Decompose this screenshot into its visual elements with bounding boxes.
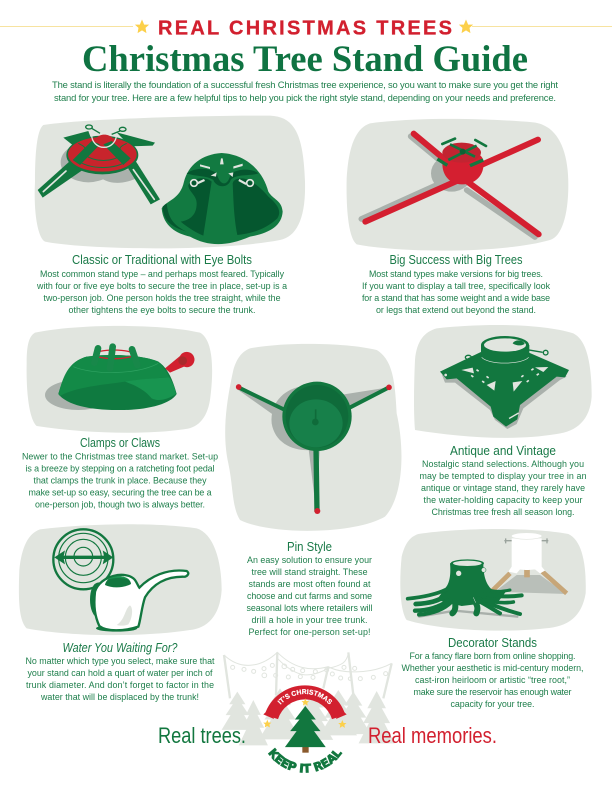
text block: decorator: make sure the reservoir has enough water [414,687,572,697]
intro line 2: stand for your tree. Here are a few helpful tips to help you pick the right style stand, depending on your needs and preference. [54,92,556,103]
text block: water: trunk diameter. And don’t forget to factor in the [26,680,214,690]
text block: clamps: is a breeze by stepping on a ratcheting foot pedal [26,464,215,474]
text block: water [26,656,215,702]
heading: antique: Antique and Vintage [450,444,556,458]
text block: clamps [22,452,218,510]
text block: antique: Christmas tree fresh all season long. [432,507,574,517]
panel: pin style illustration [225,344,401,531]
text block: decorator: capacity for your tree. [450,699,534,709]
text block: antique: antique or vintage stand, they rarely have [421,483,585,493]
header [0,18,612,103]
tagline left: Real trees. [158,723,246,748]
text block: decorator: cast-iron heirloom or artistic “tree root,” [415,675,570,685]
icon: star right [459,20,473,33]
text block: clamps: make set-up so easy, securing the tree can be a [28,488,212,498]
header rule left [0,26,133,27]
text block: water: your stand can hold a quart of water per inch of [28,668,213,678]
string lights backdrop [224,652,392,698]
text block: classic: with four or five eye bolts to secure the tree in place, set-up is a [36,281,287,291]
text block: classic: two-person job. One person holds the tree straight, while the [44,293,281,303]
icon: clamp stand [45,347,194,410]
text block: antique: may be tempted to display your tree in an [420,471,587,481]
text block: clamps: one-person job, though two is always better. [35,500,205,510]
icon: white reservoir stand [492,533,567,594]
text block: big trees: or legs that extend out beyond the stand. [376,305,536,315]
text block: water: No matter which type you select, make sure that [26,656,215,666]
text block: classic [36,269,287,315]
badge ribbon [271,692,339,717]
panel background [35,116,305,248]
icon: star left [135,20,149,33]
text block: big trees: Most stand types make versions for big trees. [369,269,543,279]
text block: big trees [362,269,551,315]
text block: antique [420,459,587,517]
panel: clamps illustration [27,326,212,433]
icon: cast iron stand [440,336,569,429]
heading: water: Water You Waiting For? [62,641,178,655]
text block: clamps: Newer to the Christmas tree stand market. Set-up [22,452,218,462]
text block: pin style: tree will stand straight. These [252,567,368,577]
text block: decorator [402,651,584,709]
icon: left star [263,720,271,728]
heading: classic: Classic or Traditional with Eye Bolts [72,253,252,267]
heading: pin style: Pin Style [287,540,332,554]
panel background [400,529,586,631]
title: Christmas Tree Stand Guide [82,39,528,80]
icon: watering can [92,570,188,632]
panel background [225,344,401,531]
heading: decorator: Decorator Stands [448,636,537,650]
text block: classic: other tightens the eye bolts to secure the trunk. [68,305,256,315]
panel: decorator illustration [400,529,586,631]
text block: pin style: drill a hole in your tree trunk. [252,615,368,625]
text block: pin style: An easy solution to ensure your [247,555,372,565]
icon: right star [338,720,346,728]
text block: classic: Most common stand type – and perhaps most feared. Typically [40,269,285,279]
text block: decorator: For a fancy flare born from online shopping. [410,651,576,661]
icon: tree root stand [408,559,522,617]
icon: red eye bolt stand [38,123,160,204]
badge text: KEEP IT REAL [268,748,342,773]
eyebrow heading: REAL CHRISTMAS TREES [158,18,452,40]
text block: pin style [246,555,373,637]
footer scene and badge [222,652,394,773]
icon: trunk rings [53,529,113,589]
panel: classic stand illustration [35,116,305,248]
icon: pin stand [236,382,392,514]
panel background [347,119,568,251]
badge [263,685,347,773]
tagline right: Real memories. [368,723,497,748]
text block: big trees: If you want to display a tall tree, specifically look [362,281,551,291]
icon: green stand underside [162,153,283,244]
heading: big trees: Big Success with Big Trees [390,253,522,267]
text block: pin style: stands are most often found at [248,579,371,589]
heading: clamps: Clamps or Claws [80,436,160,450]
panel: water illustration [19,524,222,635]
icon: badge tree [285,706,326,753]
text block: clamps: that clamps the trunk in place. Because they [34,476,207,486]
text block: water: water that will be displaced by the trunk! [40,692,199,702]
background pine trees [222,688,395,745]
intro line 1: The stand is literally the foundation of a successful fresh Christmas tree experience, so you want to make sure you get the right [52,79,558,90]
icon: red big stand [361,134,539,237]
icon: top star [302,698,309,706]
text block: antique: the water-holding capacity to keep your [424,495,583,505]
panel background [414,325,592,438]
panel background [27,326,212,433]
text block: decorator: Whether your aesthetic is mid-century modern, [402,663,584,673]
text block: antique: Nostalgic stand selections. Although you [422,459,584,469]
text block: pin style: Perfect for one-person set-up! [248,627,370,637]
panel: antique illustration [414,325,592,438]
text block: big trees: for a stand that has some weight and a wide base [362,293,550,303]
panel: big trees illustration [347,119,568,251]
panel background [19,524,222,635]
header rule right [472,26,612,27]
text block: pin style: choose and cut farms and some [247,591,372,601]
text block: pin style: seasonal lots where retailers will [246,603,373,613]
ribbon text: IT’S CHRISTMAS [277,689,332,705]
